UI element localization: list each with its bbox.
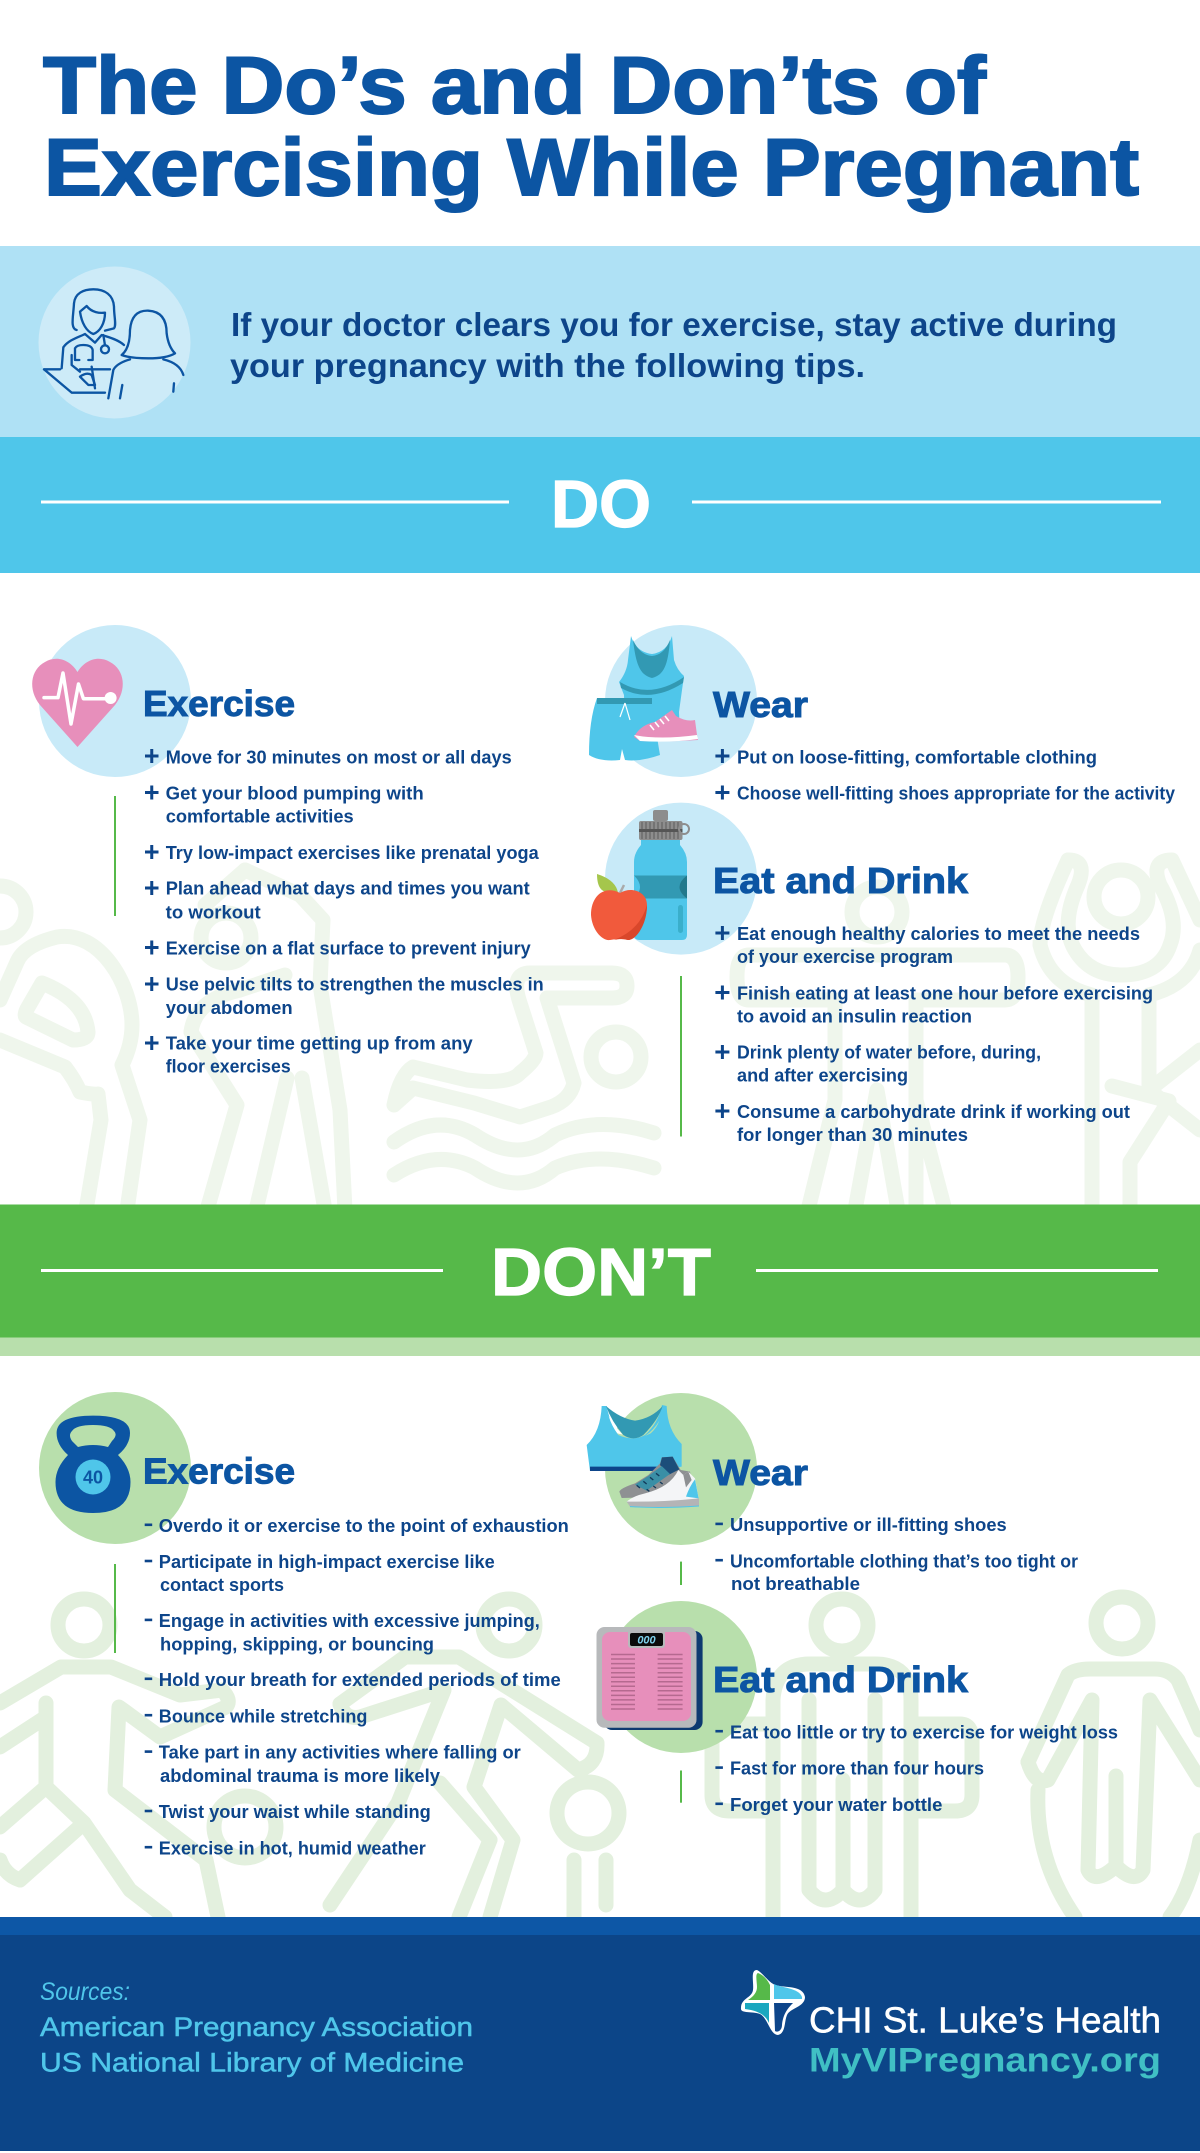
icon: bathroom scale: 000 xyxy=(637,1634,657,1646)
bullet xyxy=(145,1551,495,1595)
title xyxy=(43,41,1139,213)
bullet: Exercise on a flat surface to prevent injury xyxy=(166,937,531,958)
bullet: and after exercising xyxy=(737,1064,908,1085)
panel: intro banner xyxy=(0,246,1200,437)
bullet: Move for 30 minutes on most or all days xyxy=(166,746,512,767)
heading: Eat and Drink xyxy=(713,1659,969,1700)
bullet xyxy=(715,1550,1078,1594)
panel: don't wear xyxy=(587,1393,1078,1594)
icon: water bottle and apple xyxy=(591,803,757,955)
heading: Eat and Drink xyxy=(713,860,969,901)
connector line xyxy=(114,1564,116,1653)
bullet: of your exercise program xyxy=(737,946,953,967)
bullet: Bounce while stretching xyxy=(159,1705,367,1726)
sources: US National Library of Medicine xyxy=(40,2048,464,2078)
bullet: Finish eating at least one hour before exercising xyxy=(737,982,1153,1003)
panel: do wear xyxy=(589,625,1176,803)
background figures: do section xyxy=(0,860,1200,1210)
bullet xyxy=(715,923,1140,967)
bullet xyxy=(145,878,530,922)
banner: don't: DON’T xyxy=(491,1235,711,1310)
bullet: Take part in any activities where falling or xyxy=(159,1742,521,1763)
panel: don't eat and drink xyxy=(596,1601,1118,1815)
heading: Exercise xyxy=(143,1450,295,1492)
bullet: your abdomen xyxy=(166,997,293,1018)
bullet xyxy=(715,1101,1130,1145)
heading: Exercise xyxy=(143,683,295,724)
background figures: don't section xyxy=(0,1597,1200,1917)
bullet: contact sports xyxy=(160,1574,284,1595)
bullet: Consume a carbohydrate drink if working out xyxy=(737,1101,1130,1122)
bullet xyxy=(145,782,424,826)
bullet: Get your blood pumping with xyxy=(166,782,424,803)
bullet: Unsupportive or ill-fitting shoes xyxy=(730,1514,1007,1535)
sources xyxy=(40,1978,473,2078)
bullet: Participate in high-impact exercise like xyxy=(159,1551,495,1572)
bullet: Forget your water bottle xyxy=(730,1794,942,1815)
bullet: comfortable activities xyxy=(166,805,354,826)
bullet: Try low-impact exercises like prenatal yoga xyxy=(166,842,539,863)
bullet: to avoid an insulin reaction xyxy=(737,1005,972,1026)
bullet: hopping, skipping, or bouncing xyxy=(160,1633,434,1654)
bullet: to workout xyxy=(166,901,261,922)
title: Exercising While Pregnant xyxy=(44,123,1139,213)
heading: Wear xyxy=(713,684,808,725)
sources: American Pregnancy Association xyxy=(40,2012,473,2042)
bullet: Choose well-fitting shoes appropriate for the activity xyxy=(737,782,1176,803)
panel: footer xyxy=(0,1917,1200,2151)
bullet: Eat too little or try to exercise for weight loss xyxy=(730,1721,1118,1742)
intro text: If your doctor clears you for exercise, stay active during xyxy=(231,306,1117,343)
panel: do eat and drink xyxy=(591,803,1153,1145)
banner: do xyxy=(0,437,1200,573)
bullet xyxy=(145,1032,473,1076)
icon: bathroom scale xyxy=(596,1601,757,1753)
icon: doctor and patient xyxy=(38,266,190,418)
bullet: Plan ahead what days and times you want xyxy=(166,878,530,899)
bullet: Overdo it or exercise to the point of exhaustion xyxy=(159,1515,569,1536)
connector line xyxy=(680,1562,682,1585)
heading: Wear xyxy=(713,1452,808,1493)
bullet: Fast for more than four hours xyxy=(730,1758,984,1779)
bullet: Use pelvic tilts to strengthen the muscles in xyxy=(166,973,544,994)
icon: sports bra and shoes xyxy=(587,1393,757,1545)
intro text xyxy=(230,306,1117,384)
bullet xyxy=(715,982,1153,1026)
intro text: your pregnancy with the following tips. xyxy=(230,347,865,384)
bullet: Drink plenty of water before, during, xyxy=(737,1041,1041,1062)
connector line xyxy=(680,1770,682,1803)
icon: kettlebell: 40 xyxy=(83,1468,103,1488)
logo: cross xyxy=(741,1970,805,2035)
bullet: not breathable xyxy=(731,1573,860,1594)
panel: don't exercise xyxy=(39,1392,569,1858)
icon: heart xyxy=(32,625,191,777)
bullet: Twist your waist while standing xyxy=(159,1801,431,1822)
bullet xyxy=(145,1610,540,1654)
bullet: Hold your breath for extended periods of time xyxy=(159,1669,561,1690)
sources: Sources: xyxy=(40,1978,130,2006)
bullet: Uncomfortable clothing that’s too tight or xyxy=(730,1550,1078,1571)
banner: do: DO xyxy=(551,467,651,542)
banner: don't xyxy=(0,1204,1200,1356)
bullet xyxy=(715,1041,1041,1085)
connector line xyxy=(680,976,682,1136)
bullet: for longer than 30 minutes xyxy=(737,1124,968,1145)
bullet: Engage in activities with excessive jumping, xyxy=(159,1610,540,1631)
panel: do exercise xyxy=(32,625,544,1076)
website: MyVIPregnancy.org xyxy=(809,2042,1161,2080)
bullet: floor exercises xyxy=(166,1055,291,1076)
bullet xyxy=(145,1742,521,1786)
organisation name: CHI St. Luke’s Health xyxy=(809,2000,1161,2041)
bullet: Put on loose-fitting, comfortable clothing xyxy=(737,746,1097,767)
bullet: Eat enough healthy calories to meet the needs xyxy=(737,923,1140,944)
connector line xyxy=(114,796,116,916)
icon: kettlebell xyxy=(39,1392,191,1544)
bullet: Take your time getting up from any xyxy=(166,1032,473,1053)
icon: tank top, shorts and sneaker xyxy=(589,625,757,777)
bullet: Exercise in hot, humid weather xyxy=(159,1837,426,1858)
bullet: abdominal trauma is more likely xyxy=(160,1765,441,1786)
bullet xyxy=(145,973,544,1018)
title: The Do’s and Don’ts of xyxy=(43,41,987,131)
